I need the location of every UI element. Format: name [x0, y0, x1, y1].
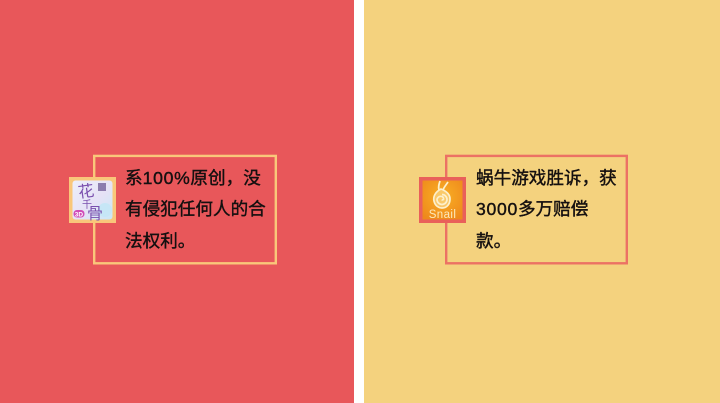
text block: left statement: 有侵犯任何人的合: [125, 199, 266, 219]
icon: game app logo: [69, 177, 116, 223]
text block: right statement: 蜗牛游戏胜诉，获: [476, 168, 617, 188]
callout frame: right: [445, 154, 628, 264]
text block: right statement: 款。: [476, 231, 511, 251]
text block: left statement: 法权利。: [125, 231, 195, 251]
text block: left statement: 系100%原创，没: [125, 168, 261, 188]
icon: game app logo: 花: [76, 177, 95, 203]
icon: Snail logo: Snail: [429, 209, 456, 221]
icon: Snail logo: [419, 177, 466, 223]
text block: right statement: 3000多万赔偿: [476, 199, 588, 219]
panel: right yellow: [364, 0, 720, 403]
icon: game app logo: 3D: [75, 212, 83, 218]
callout frame: left: [93, 154, 277, 264]
text block: right statement: [476, 168, 617, 251]
text block: left statement: [125, 168, 266, 251]
icon: game app logo: 千: [82, 196, 92, 211]
panel: left red: [0, 0, 354, 403]
